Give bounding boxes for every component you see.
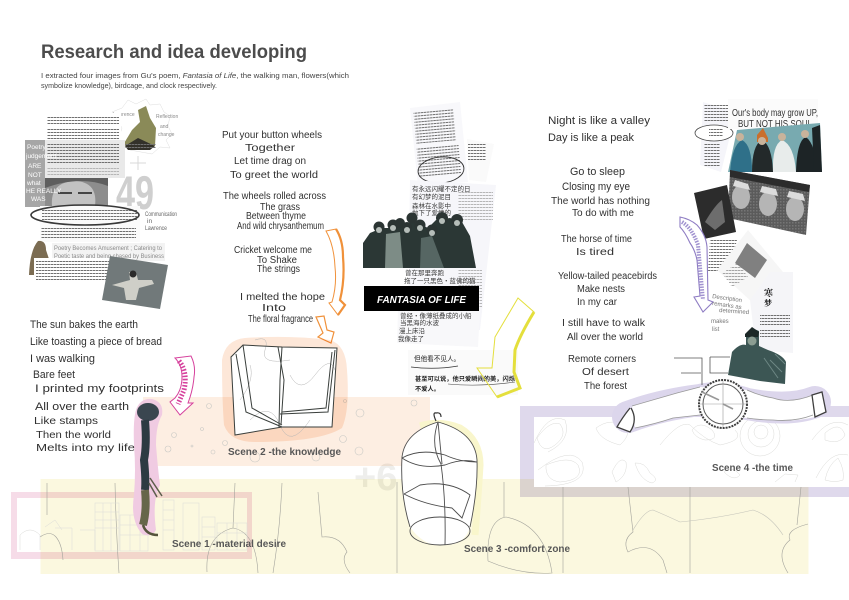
poem 2: handwriting: I melted the hope — [240, 292, 325, 303]
panel: scene 1 pink frame — [11, 492, 252, 559]
bottom quote: 不爱人。 — [415, 384, 440, 393]
poem 1: handwriting: I printed my footprints — [35, 383, 165, 395]
poem 3: handwriting: The world has nothing — [551, 196, 650, 207]
group photograph — [363, 212, 476, 268]
paper with calligraphy: 梦 — [764, 298, 772, 309]
purple arrow — [680, 217, 713, 312]
black banner: Fantasia of Life — [364, 286, 479, 311]
panel: scene 3 yellow ground band — [40, 479, 808, 574]
bottom quote — [408, 350, 518, 395]
handwritten note: Lawrence — [145, 225, 167, 232]
spiky bubble with portrait: and — [160, 124, 169, 130]
paper top — [410, 102, 468, 186]
handwritten grey note: list — [712, 327, 720, 333]
yellow arrow — [477, 298, 534, 397]
poem 1: handwriting: Bare feet — [33, 369, 75, 381]
spiky bubble with portrait: Reflection — [156, 114, 178, 120]
handwritten grey note: makes — [711, 319, 729, 325]
intro paragraph: I extracted four images from Gu's poem, Fantasia of Life , the walking man, flowers(which — [41, 71, 349, 80]
title: Research and idea developing — [41, 41, 307, 63]
panel: scene 2 peach band — [143, 397, 430, 466]
poem 2: handwriting: Between thyme — [246, 211, 306, 222]
poem 3: handwriting: Night is like a valley — [548, 115, 651, 127]
handwritten grey note: remarks as — [712, 301, 742, 311]
poem 3: handwriting: Of desert — [582, 367, 629, 378]
colour photograph — [728, 123, 822, 172]
poem 3: handwriting: In my car — [577, 297, 618, 308]
lower paper: 漫上床沿 — [399, 326, 426, 335]
poem 1: handwriting — [30, 319, 165, 454]
label: scene 3: Scene 3 -comfort zone — [464, 543, 570, 555]
poem 3: handwriting: Remote corners — [568, 354, 636, 365]
rotated paper with black lines — [708, 230, 783, 303]
circled paragraph — [31, 205, 140, 242]
bottom quote: 甚至可以说，他只爱瞬间的美，闪烁 — [415, 374, 516, 383]
icon: book on peach halo — [222, 337, 348, 442]
poem 2: handwriting: To greet the world — [230, 170, 318, 181]
poem 3: handwriting: Closing my eye — [562, 181, 630, 193]
chinese lines above the photo: 曾在那里奔跑 — [405, 268, 444, 277]
handwritten note: in — [147, 218, 152, 225]
lower paper: 当黑海的水波 — [400, 318, 440, 327]
pink arrow — [170, 356, 195, 415]
lower paper: 我像走了 — [398, 334, 424, 343]
chinese lines above the photo — [404, 184, 476, 285]
poem 2: handwriting: The grass — [260, 202, 300, 213]
lower paper: 曾经・像薄纸叠成的小船 — [400, 311, 472, 320]
poem 2: handwriting: Cricket welcome me — [234, 245, 312, 256]
poem 3: handwriting: Is tired — [576, 247, 614, 258]
poem 3: handwriting — [548, 115, 657, 392]
white handwriting on the grey block: WAS — [31, 196, 46, 203]
plus sign — [130, 156, 146, 170]
white handwriting on the grey block: HE REALLY — [26, 188, 62, 195]
chinese lines above the photo: 有幻梦的泥目 — [412, 192, 451, 201]
spiky bubble with portrait: change — [158, 132, 175, 138]
poem 1: handwriting: Melts into my life — [36, 443, 136, 454]
collage 3: clock clippings — [680, 99, 822, 384]
rotated photograph — [102, 256, 168, 309]
icon: wristwatch on lavender halo — [617, 357, 826, 432]
lower paper — [397, 311, 480, 347]
paper clipping — [45, 113, 121, 171]
poem 3: handwriting: Yellow-tailed peacebirds — [558, 271, 657, 282]
label: scene 4: Scene 4 -the time — [712, 462, 793, 474]
label: scene 1: Scene 1 -material desire — [172, 538, 286, 550]
intro paragraph: symbolize knowledge), birdcage, and clock respectively. — [41, 81, 217, 90]
white handwriting on the grey block: NOT — [28, 172, 42, 179]
orange arrows — [316, 229, 345, 343]
poem 2: handwriting: Into — [262, 303, 287, 314]
poem 3: handwriting: Go to sleep — [570, 166, 625, 178]
poem 2: handwriting: The strings — [257, 264, 300, 275]
top-left paper — [695, 102, 736, 172]
small seated figure — [29, 241, 50, 275]
faint grey numerals behind the birdcage: +6 — [354, 457, 397, 499]
poem 3: handwriting: The forest — [584, 381, 627, 392]
big grey number 49: 49 — [116, 166, 154, 219]
poem 1: handwriting: Then the world — [36, 430, 111, 441]
label: scene 2: Scene 2 -the knowledge — [228, 446, 341, 458]
icon: walking figure on pink halo — [133, 399, 162, 535]
spiky bubble with portrait: Lawrence — [113, 112, 135, 118]
paper with calligraphy — [750, 272, 793, 353]
poem 2: handwriting: Together — [245, 143, 296, 154]
grey handwritten band: Poetry Becomes Amusement ; Catering to — [54, 246, 163, 252]
poem 1: handwriting: I was walking — [30, 353, 95, 365]
caption paper — [34, 258, 132, 283]
white handwriting on the grey block: judgement — [25, 153, 57, 160]
grey handwritten band: Poetic taste and being chased by Business — [54, 254, 164, 260]
chinese lines above the photo: 有永远闪耀不定的日 — [412, 184, 470, 193]
poem 3: handwriting: I still have to walk — [562, 318, 646, 329]
paper with calligraphy: 寒 — [764, 286, 773, 299]
poem 3: handwriting: Day is like a peak — [548, 132, 634, 144]
intro paragraph — [41, 71, 349, 90]
handwritten grey note — [711, 294, 749, 333]
poem 1: handwriting: The sun bakes the earth — [30, 319, 138, 331]
sketch: scattered flowers — [165, 400, 417, 462]
poem 2: handwriting: The wheels rolled across — [223, 191, 326, 202]
poem 2: handwriting: Put your button wheels — [222, 130, 322, 141]
poem 2: handwriting: And wild chrysanthemum — [237, 221, 324, 232]
collage 2: book clippings — [363, 102, 518, 395]
spiky bubble with portrait — [112, 99, 178, 154]
face photograph — [45, 178, 108, 206]
sketch: melting clocks in scene 4 — [534, 416, 848, 486]
black and white newspaper — [728, 170, 810, 235]
poem 2: handwriting: Let time drag on — [234, 156, 306, 167]
poem 2: handwriting — [222, 130, 326, 325]
chinese lines above the photo: 森林在水影中 — [412, 201, 451, 210]
grey handwritten band — [52, 243, 165, 261]
handwritten grey note: determined — [719, 308, 749, 316]
white handwriting on the grey block: ARE — [28, 163, 42, 170]
black banner: Fantasia of Life: FANTASIA OF LIFE — [377, 294, 467, 306]
white handwriting on the grey block: Poetry — [27, 144, 47, 151]
dark poster — [694, 185, 736, 239]
white handwriting on the grey block: what — [26, 180, 41, 187]
poem 2: handwriting: The floral fragrance — [248, 314, 313, 325]
poem 3: handwriting: The horse of time — [561, 234, 632, 245]
panel: scene 4 lavender frame — [520, 406, 849, 497]
bottom quote: 但他看不见人。 — [414, 354, 460, 363]
icon: birdcage — [402, 413, 480, 545]
grey block backing — [25, 140, 125, 207]
handwritten white note: Our's body may grow UP, — [732, 108, 818, 119]
sketch: hanging forms in the yellow band — [40, 482, 808, 573]
handwritten grey note: Description — [712, 294, 742, 304]
dark portrait figure — [728, 327, 786, 384]
handwritten white note: BUT NOT HIS SOUL — [738, 119, 812, 130]
handwritten note — [145, 211, 177, 232]
poem 3: handwriting: To do with me — [572, 208, 634, 219]
poem 3: handwriting: Make nests — [577, 284, 625, 295]
paper side — [467, 139, 494, 182]
handwritten note: Communication — [145, 211, 177, 218]
chinese lines above the photo: 抛下了爱情的 — [412, 208, 452, 217]
poem 1: handwriting: Like toasting a piece of bread — [30, 336, 162, 348]
poem 3: handwriting: All over the world — [567, 332, 643, 343]
handwritten white note — [728, 99, 818, 130]
poem 1: handwriting: Like stamps — [34, 416, 98, 427]
sketch: city skyline — [20, 500, 247, 551]
white handwriting on the grey block — [25, 144, 62, 203]
chinese lines above the photo: 拖了一只黑色・蓝佛的猫 — [404, 276, 476, 285]
paper middle — [408, 180, 496, 330]
collage 1: research clippings — [25, 99, 178, 309]
poem 1: handwriting: All over the earth — [35, 401, 129, 413]
poem 2: handwriting: To Shake — [257, 255, 297, 266]
